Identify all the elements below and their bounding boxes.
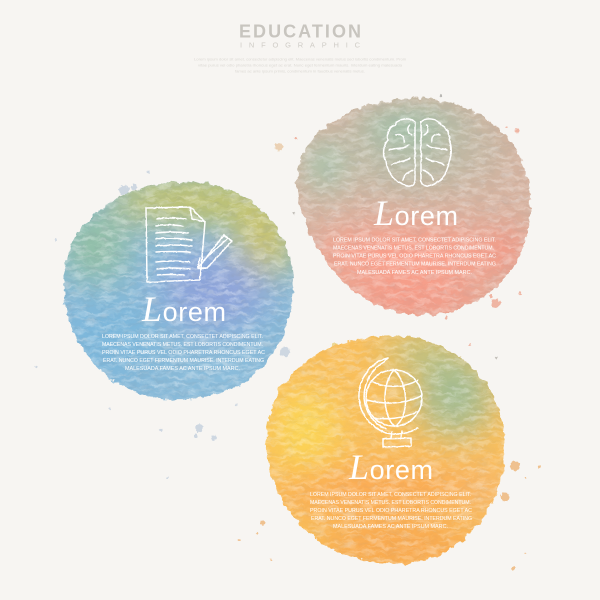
- body text: MALESUADA FAMES AC ANTE IPSUM MARC.: [357, 270, 472, 276]
- body text: [333, 238, 496, 276]
- body text: MALESUADA FAMES AC ANTE IPSUM MARC.: [333, 524, 448, 530]
- intro text block: vitae purus vel odio pharetra rhoncus eget ac erat. Nunc eget fermentum mauris. Interdum eating malesuada: [198, 62, 403, 68]
- title: INFOGRAPHIC: [240, 40, 361, 50]
- intro text block: fames ac ante ipsum primis, condimentum in faucibus venenatis metus.: [235, 68, 365, 74]
- label: Lorem: Lorem: [141, 289, 226, 329]
- panel: red watercolor circle: [294, 96, 532, 316]
- body text: PROIN VITAE PURUS VEL ODIO PHARETRA RHONCUS EGET AC: [102, 350, 265, 356]
- panel: orange watercolor circle: [264, 335, 506, 566]
- body text: ERAT. NUNCO EGET FERMENTUM MAURISE. INTERDUM EATING: [334, 262, 496, 268]
- label: Lorem: Lorem: [348, 447, 433, 487]
- body text: MAECENAS VENENATIS METUS. EST LOBORTIS CONDIMENTUM.: [102, 342, 263, 348]
- watercolor blob: orange: [264, 335, 506, 566]
- body text: PROIN VITAE PURUS VEL ODIO PHARETRA RHONCUS EGET AC: [333, 254, 496, 260]
- icon: globe: [359, 358, 422, 447]
- watercolor blob: blue: [62, 180, 294, 401]
- body text: PROIN VITAE PURUS VEL ODIO PHARETRA RHONCUS EGET AC: [310, 508, 472, 514]
- body text: LOREM IPSUM DOLOR SIT AMET, CONSECTET ADIPISCING ELIT.: [310, 492, 471, 498]
- body text: LOREM IPSUM DOLOR SIT AMET, CONSECTET ADIPISCING ELIT.: [333, 238, 496, 244]
- label: Lorem: Lorem: [373, 193, 458, 233]
- body text: [310, 492, 472, 530]
- body text: MALESUADA FAMES AC ANTE IPSUM MARC.: [125, 366, 240, 372]
- body text: [102, 334, 265, 372]
- body text: MAECENAS VENENATIS METUS. EST LOBORTIS CONDIMENTUM.: [310, 500, 471, 506]
- icon: brain: [384, 119, 451, 186]
- panel: blue watercolor circle: [62, 180, 294, 401]
- title: EDUCATION: [239, 22, 361, 42]
- intro text block: [194, 56, 406, 74]
- intro text block: Lorem ipsum dolor sit amet, consectetur adipiscing elit. Maecenas venenatis metus sed lobortis condimentum. Proin: [194, 56, 406, 62]
- body text: ERAT. NUNCO EGET FERMENTUM MAURISE. INTERDUM EATING: [103, 358, 264, 364]
- watercolor blob: red: [294, 96, 532, 316]
- icon: document and pencil: [146, 207, 232, 282]
- body text: ERAT. NUNCO EGET FERMENTUM MAURISE. INTERDUM EATING: [311, 516, 472, 522]
- body text: MAECENAS VENENATIS METUS. EST LOBORTIS CONDIMENTUM.: [333, 246, 494, 252]
- paint splatters: [35, 95, 540, 570]
- body text: LOREM IPSUM DOLOR SIT AMET, CONSECTET ADIPISCING ELIT.: [102, 334, 263, 340]
